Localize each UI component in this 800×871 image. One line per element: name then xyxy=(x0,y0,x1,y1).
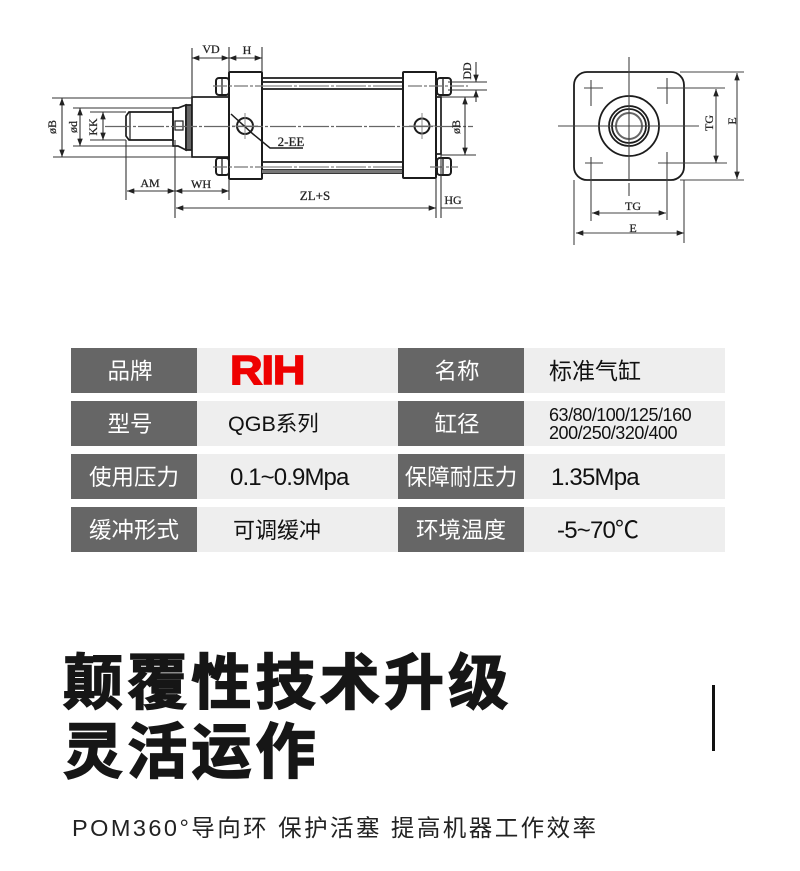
row 4 value: ambient temperature: -5~70℃ xyxy=(557,517,638,544)
dimension labels: H xyxy=(243,43,252,57)
front head block xyxy=(192,97,229,157)
subtitle: POM360°导向环 保护活塞 提高机器工作效率 xyxy=(72,815,598,841)
row 3 label: proof pressure xyxy=(398,454,524,499)
row 4 value: cushion type xyxy=(197,507,398,552)
square end plate xyxy=(574,72,684,180)
row 1 label: name xyxy=(398,348,524,393)
row 4 value: ambient temperature xyxy=(524,507,725,552)
row 3 label: working pressure: 使用压力 xyxy=(89,465,179,490)
front flange xyxy=(229,72,262,179)
dimension labels: ZL+S xyxy=(300,188,330,203)
row 1 value: name xyxy=(524,348,725,393)
row 2 value: bore sizes: 63/80/100/125/160 xyxy=(549,405,691,425)
technical drawing: end view xyxy=(558,57,744,245)
dimension labels: VD xyxy=(202,42,220,56)
spec table xyxy=(71,347,725,552)
bore circles xyxy=(599,96,659,156)
row 4 value: cushion type: 可调缓冲 xyxy=(233,518,321,543)
heading line 1: 颠覆性技术升级 xyxy=(63,650,512,717)
row 2 value: bore sizes: 200/250/320/400 xyxy=(549,423,677,443)
ports xyxy=(231,113,435,148)
centre lines xyxy=(105,126,473,128)
end view labels: E xyxy=(629,221,637,235)
dimension labels: 2-EE xyxy=(278,134,304,149)
dimension labels xyxy=(45,42,474,207)
end view labels: TG xyxy=(625,199,641,213)
dimension lines xyxy=(52,47,487,218)
heading line 2: 灵活运作 xyxy=(63,719,320,786)
row 4 label: cushion type: 缓冲形式 xyxy=(89,518,179,543)
row 2 label: model: 型号 xyxy=(107,412,152,437)
tie rod nuts xyxy=(216,78,451,175)
row 2 label: bore: 缸径 xyxy=(434,412,480,437)
dimension labels: HG xyxy=(444,193,462,207)
end view labels xyxy=(625,115,739,235)
row 4 label: ambient temperature xyxy=(398,507,524,552)
dimension labels: øB xyxy=(45,120,59,134)
row 2 value: model: QGB系列 xyxy=(228,412,319,436)
row 3 value: working pressure: 0.1~0.9Mpa xyxy=(230,464,348,491)
piston rod xyxy=(126,105,192,150)
row 2 label: bore xyxy=(398,401,524,446)
dimension labels: DD xyxy=(460,62,474,80)
row 4 label: ambient temperature: 环境温度 xyxy=(416,518,506,543)
row 4 label: cushion type xyxy=(71,507,197,552)
dimension labels: øB xyxy=(449,120,463,134)
row 3 label: working pressure xyxy=(71,454,197,499)
technical drawing: side view xyxy=(45,42,744,245)
row 3 label: proof pressure: 保障耐压力 xyxy=(405,465,517,490)
row 1 label: brand xyxy=(71,348,197,393)
row 2 label: model xyxy=(71,401,197,446)
dimension labels: ød xyxy=(66,121,80,133)
rear end cap xyxy=(403,72,436,178)
end view labels: E xyxy=(725,117,739,125)
row 3 value: proof pressure: 1.35Mpa xyxy=(551,464,639,491)
end view labels: TG xyxy=(702,115,716,131)
dimension labels: AM xyxy=(140,176,160,190)
cylinder tube and tie rods xyxy=(262,78,403,173)
row 1 label: name: 名称 xyxy=(434,359,480,384)
row 1 label: brand: 品牌 xyxy=(107,359,152,384)
dimension labels: WH xyxy=(191,177,211,191)
row 3 value: proof pressure xyxy=(524,454,725,499)
row 2 value: bore sizes xyxy=(524,401,725,446)
row 2 value: model xyxy=(197,401,398,446)
row 1 value: RIH logo xyxy=(197,348,398,393)
row 1 value: name: 标准气缸 xyxy=(549,358,641,384)
row 1 value: RIH logo: RIH xyxy=(230,347,304,393)
dimension labels: KK xyxy=(86,118,100,136)
vertical accent bar xyxy=(712,685,715,751)
rear plate xyxy=(436,97,441,154)
end view centre lines and dimensions xyxy=(558,57,744,245)
row 3 value: working pressure xyxy=(197,454,398,499)
